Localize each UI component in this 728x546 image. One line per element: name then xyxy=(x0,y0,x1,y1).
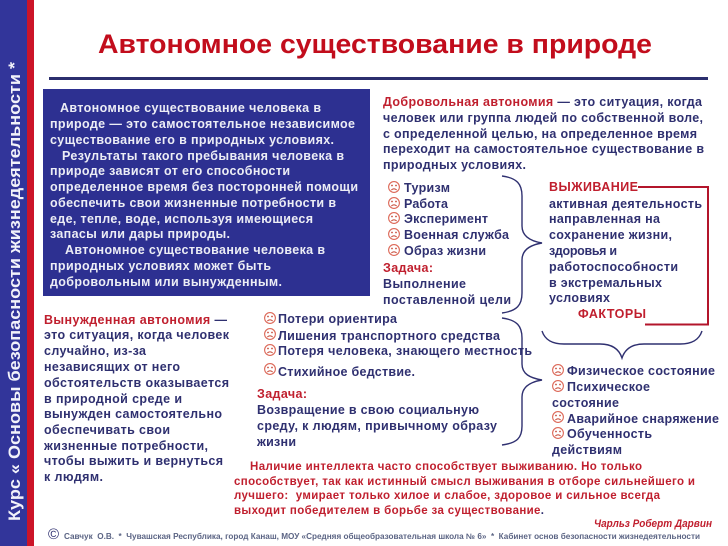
list: forced autonomy causes and task: Потери ориентира xyxy=(278,312,398,326)
connector: survival to factors xyxy=(638,187,708,324)
list: forced autonomy causes and task: Лишения транспортного средства xyxy=(278,329,501,343)
quote: Darwin: выходит победителем в борьбе за существование. xyxy=(234,505,544,517)
list: forced autonomy causes and task: среду, к людям, привычному образу xyxy=(257,419,497,433)
list: voluntary autonomy types and task xyxy=(383,181,511,307)
panel: definition of autonomous existence: определенное время без посторонней помощи xyxy=(50,180,358,194)
panel: definition of autonomous existence: Автономное существование человека в xyxy=(65,243,325,257)
title underline xyxy=(49,77,708,80)
brace: survival down to factors xyxy=(542,331,702,358)
list: survival factors xyxy=(552,364,719,457)
list: forced autonomy causes and task: Возвращение в свою социальную xyxy=(257,403,479,417)
brace: voluntary to survival xyxy=(502,176,542,313)
text block: survival definition: сохранение жизни, xyxy=(549,228,672,242)
quote: Darwin: Чарльз Роберт Дарвин xyxy=(594,518,712,530)
panel: definition of autonomous existence: природе — это самостоятельное независимое xyxy=(50,117,355,131)
title: Автономное существование в природе xyxy=(98,29,652,59)
list: survival factors: Физическое состояние xyxy=(567,364,715,378)
text block: survival definition: активная деятельность xyxy=(549,197,702,211)
panel: definition of autonomous existence: природе зависят от его способности xyxy=(50,164,290,178)
sidebar: course title: Курс « Основы безопасности жизнедеятельности * xyxy=(5,62,24,521)
text block: forced autonomy: независящих от него xyxy=(44,360,180,374)
text block: forced autonomy: это ситуация, когда человек xyxy=(44,328,230,342)
panel: definition of autonomous existence: Результаты такого пребывания человека в xyxy=(62,149,344,163)
list: voluntary autonomy types and task: Военная служба xyxy=(404,228,510,242)
sidebar: course title xyxy=(0,0,34,546)
text block: survival definition: здоровья и xyxy=(549,244,617,258)
panel: definition of autonomous existence: обеспечить свои жизненные потребности в xyxy=(50,196,336,210)
quote: Darwin: лучшего: умирает только хилое и слабое, здоровое и сильное всегда xyxy=(234,490,661,502)
text block: forced autonomy: Вынужденная автономия — xyxy=(44,313,228,327)
quote: Darwin: способствует, так как истинный смысл выживания в отборе сильнейшего и xyxy=(234,476,695,488)
list: forced autonomy causes and task: Задача: xyxy=(257,387,307,401)
text block: forced autonomy: обстоятельств оказывается xyxy=(44,376,229,390)
text block: forced autonomy: чтобы выжить и вернуться xyxy=(44,454,223,468)
list: survival factors: Психическое xyxy=(567,380,650,394)
text block: forced autonomy: жизненные потребности, xyxy=(43,439,208,453)
footer credits: Савчук О.В. * Чувашская Республика, город Канаш, МОУ «Средняя общеобразовательная школа № 6» * Кабинет основ безопасности жизнедеятельности xyxy=(64,532,700,541)
list: voluntary autonomy types and task: Задача: xyxy=(383,261,433,275)
panel: definition of autonomous existence: Автономное существование человека в xyxy=(60,101,321,115)
list: voluntary autonomy types and task: Эксперимент xyxy=(404,212,488,226)
text block: forced autonomy xyxy=(43,313,230,484)
text block: voluntary autonomy: с определенной целью, на определенное время xyxy=(383,127,697,141)
panel: definition of autonomous existence: природных условиях может быть xyxy=(50,259,271,273)
list: survival factors: действиям xyxy=(552,443,622,457)
list: survival factors: состояние xyxy=(552,396,619,410)
list: survival factors: Аварийное снаряжение xyxy=(567,412,719,426)
list: forced autonomy causes and task xyxy=(256,312,532,449)
text block: survival definition xyxy=(549,180,702,321)
panel: definition of autonomous existence: добровольным или вынужденным. xyxy=(50,275,282,289)
text block: voluntary autonomy: человек или группа людей по собственной воле, xyxy=(383,111,703,125)
text block: forced autonomy: к людям. xyxy=(44,470,103,484)
text block: forced autonomy: обеспечивать свои xyxy=(44,423,170,437)
text block: forced autonomy: в природной среде и xyxy=(44,392,182,406)
text block: voluntary autonomy: Добровольная автономия — это ситуация, когда xyxy=(383,95,703,109)
text block: forced autonomy: вынужден самостоятельно xyxy=(44,407,222,421)
text block: survival definition: ВЫЖИВАНИЕ xyxy=(549,180,638,194)
panel: definition of autonomous existence: существование его в природных условиях. xyxy=(50,133,334,147)
text block: survival definition: ФАКТОРЫ xyxy=(578,307,646,321)
text block: survival definition: в экстремальных xyxy=(549,276,662,290)
list: forced autonomy causes and task: Стихийное бедствие. xyxy=(278,365,415,379)
footer credits xyxy=(48,526,700,543)
text block: survival definition: направленная на xyxy=(549,212,661,226)
text block: survival definition: условиях xyxy=(549,291,610,305)
footer credits: © xyxy=(48,526,59,543)
text block: voluntary autonomy xyxy=(383,95,704,172)
list: voluntary autonomy types and task: Работа xyxy=(404,197,449,211)
panel: definition of autonomous existence: еде, тепле, воде, используя имеющиеся xyxy=(50,212,313,226)
panel: definition of autonomous existence: запасы или дары природы. xyxy=(50,227,230,241)
list: voluntary autonomy types and task: поставленной цели xyxy=(383,293,511,307)
list: forced autonomy causes and task: Потеря человека, знающего местность xyxy=(278,344,532,358)
panel: definition of autonomous existence xyxy=(43,89,370,296)
list: survival factors: Обученность xyxy=(567,427,652,441)
brace: forced to factors xyxy=(502,318,542,445)
text block: survival definition: работоспособности xyxy=(549,260,678,274)
list: voluntary autonomy types and task: Образ жизни xyxy=(404,244,486,258)
text block: voluntary autonomy: переходит на самостоятельное существование в xyxy=(383,142,704,156)
text block: voluntary autonomy: природных условиях. xyxy=(383,158,526,172)
list: forced autonomy causes and task: жизни xyxy=(256,435,296,449)
quote: Darwin xyxy=(234,461,712,530)
list: voluntary autonomy types and task: Туризм xyxy=(404,181,450,195)
quote: Darwin: Наличие интеллекта часто способствует выживанию. Но только xyxy=(250,461,642,473)
list: voluntary autonomy types and task: Выполнение xyxy=(383,277,466,291)
text block: forced autonomy: случайно, из-за xyxy=(44,344,147,358)
